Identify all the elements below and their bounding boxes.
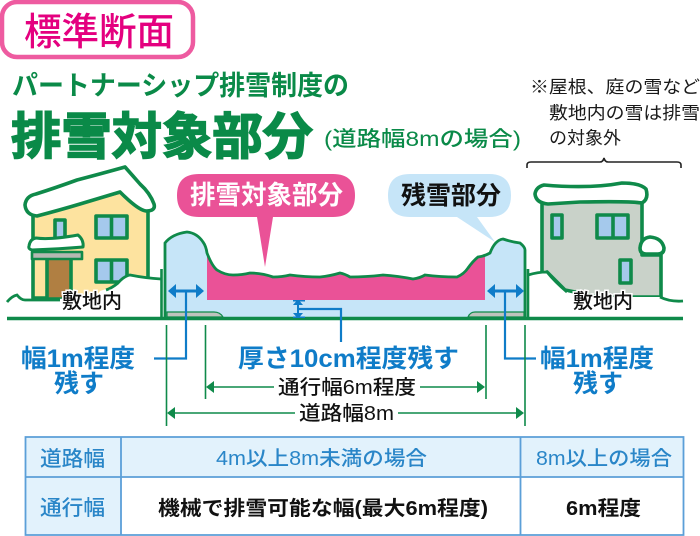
label: 敷地内 left: 敷地内 — [62, 290, 122, 313]
door — [47, 258, 71, 299]
label: 通行幅6m程度: 通行幅6m程度 — [278, 376, 416, 399]
label: 敷地内 right: 敷地内 — [573, 290, 633, 313]
house wall — [542, 200, 661, 297]
porch snow — [29, 235, 83, 250]
title note: road width: (道路幅8mの場合) — [324, 128, 521, 151]
label: 幅1m程度残す left: 残す — [54, 369, 104, 398]
table header: 道路幅: 道路幅 — [40, 448, 105, 471]
gutter right — [468, 312, 524, 317]
window upper — [96, 216, 127, 238]
subtitle: パートナーシップ排雪制度の — [12, 71, 349, 101]
roof snow — [535, 183, 647, 204]
dimension guides — [166, 325, 525, 426]
fence posts — [162, 269, 528, 318]
bubble: residual snow — [388, 174, 511, 242]
house right — [535, 183, 664, 297]
dimension arrowheads — [167, 381, 524, 419]
window small — [55, 220, 65, 240]
table cell: 4m以上8m未満の場合: 4m以上8m未満の場合 — [216, 447, 427, 470]
badge: 標準断面: 標準断面 — [24, 12, 174, 54]
table header: 通行幅: 通行幅 — [40, 497, 105, 520]
snow surface outline — [165, 232, 525, 318]
title: 排雪対象部分: 排雪対象部分 — [11, 109, 313, 165]
label: 厚さ10cm程度残す: 厚さ10cm程度残す — [238, 344, 459, 373]
bubble: residual snow: 残雪部分 — [401, 181, 501, 210]
snow removal area — [207, 253, 485, 300]
house left — [25, 167, 154, 299]
note: out of scope: 敷地内の雪は排雪 — [549, 103, 700, 123]
arrows: width and thickness — [168, 284, 524, 318]
bracket — [527, 158, 681, 168]
label: 幅1m程度残す right: 幅1m程度 — [540, 345, 654, 373]
table — [26, 437, 684, 535]
note: out of scope — [530, 77, 700, 148]
ground snow outline right — [528, 272, 683, 301]
bubble: snow removal — [177, 174, 355, 267]
window lower — [96, 260, 127, 282]
ground snow left — [7, 275, 161, 318]
gutter left — [167, 312, 223, 317]
label: 幅1m程度残す right — [540, 345, 654, 398]
window small 2 — [620, 260, 631, 283]
label: 道路幅8m: 道路幅8m — [299, 402, 394, 425]
ground snow right — [528, 272, 683, 318]
label: 幅1m程度残す left: 幅1m程度 — [21, 345, 135, 373]
ground line — [7, 317, 683, 320]
label: 幅1m程度残す left — [21, 345, 135, 398]
porch roof — [32, 252, 82, 259]
note: out of scope: ※屋根、庭の雪など — [530, 77, 700, 97]
badge: 標準断面 — [2, 2, 193, 57]
window double — [597, 215, 628, 238]
window small 1 — [552, 215, 562, 238]
ground snow outline left — [7, 275, 161, 302]
roof snow — [25, 167, 154, 216]
blue leader lines — [154, 291, 536, 358]
table cell: 8m以上の場合: 8m以上の場合 — [536, 447, 672, 470]
table cell: machine width: 機械で排雪可能な幅(最大6m程度) — [158, 497, 488, 520]
note: out of scope: の対象外 — [549, 128, 622, 148]
label: 幅1m程度残す right: 残す — [573, 369, 623, 398]
house wall — [33, 192, 148, 298]
bubble: snow removal: 排雪対象部分 — [190, 180, 343, 210]
side snow — [640, 237, 664, 254]
table cell: 6m程度: 6m程度 — [566, 497, 641, 520]
road snow residual — [165, 232, 525, 318]
